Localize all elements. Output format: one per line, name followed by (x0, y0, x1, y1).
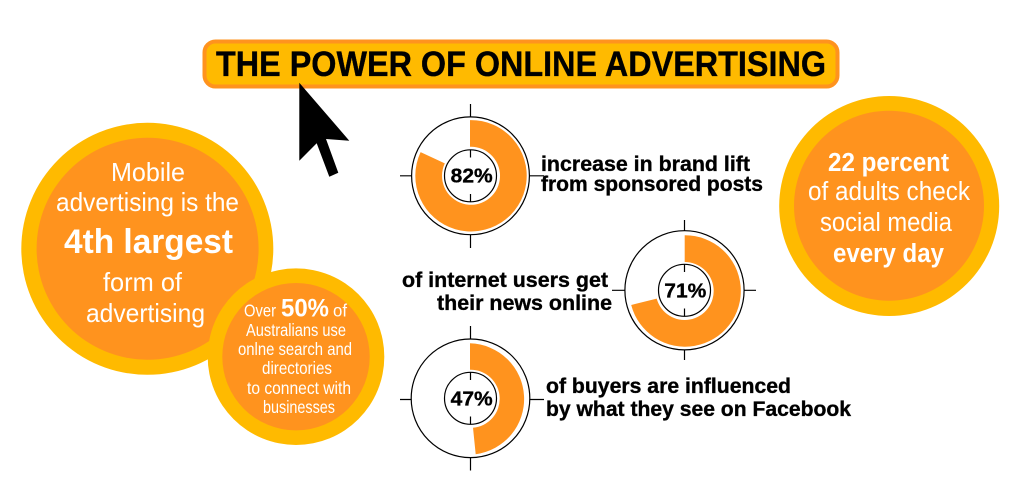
mobile advertising text: 4th largest (64, 223, 233, 261)
panel: mobile advertising circle (21, 123, 273, 375)
label: Facebook buyers: by what they see on Facebook (546, 398, 851, 421)
Australians search text: Australians use (246, 320, 346, 340)
social media text: 22 percent (828, 149, 949, 177)
label: brand lift (541, 153, 763, 196)
title: THE POWER OF ONLINE ADVERTISING (216, 45, 826, 84)
label: news online: of internet users get (402, 269, 608, 292)
mobile advertising text (56, 157, 239, 328)
icon: mouse cursor arrow (299, 83, 349, 177)
donut chart: 71% (612, 220, 756, 360)
social media text: of adults check (808, 178, 970, 206)
donut chart: 82% (400, 104, 544, 248)
Australians search text: of (333, 300, 347, 320)
social media text: social media (820, 209, 953, 237)
value: 47% (451, 387, 493, 410)
value: 71% (664, 279, 706, 302)
label: Facebook buyers (546, 375, 851, 421)
label: Facebook buyers: of buyers are influenced (546, 375, 791, 398)
title banner (204, 42, 838, 86)
panel: social media circle (779, 96, 999, 316)
Australians search text: directories (262, 358, 332, 378)
social media text (808, 149, 970, 268)
label: brand lift: increase in brand lift (541, 153, 750, 176)
label: brand lift: from sponsored posts (541, 173, 763, 196)
label: news online: their news online (437, 292, 612, 315)
Australians search text: businesses (263, 397, 335, 417)
panel: Australians search circle (208, 268, 384, 445)
Australians search text: Over (244, 300, 276, 320)
Australians search text (238, 294, 352, 417)
label: news online (402, 269, 612, 315)
Australians search text: onlne search and (238, 339, 352, 359)
value: 82% (451, 165, 493, 188)
donut chart: 47% (400, 326, 544, 470)
Australians search text: to connect with (247, 378, 351, 398)
mobile advertising text: advertising (86, 298, 205, 328)
mobile advertising text: advertising is the (56, 187, 239, 217)
social media text: every day (833, 240, 945, 268)
mobile advertising text: Mobile (111, 157, 185, 187)
mobile advertising text: form of (103, 267, 183, 297)
Australians search text: 50% (281, 294, 329, 322)
